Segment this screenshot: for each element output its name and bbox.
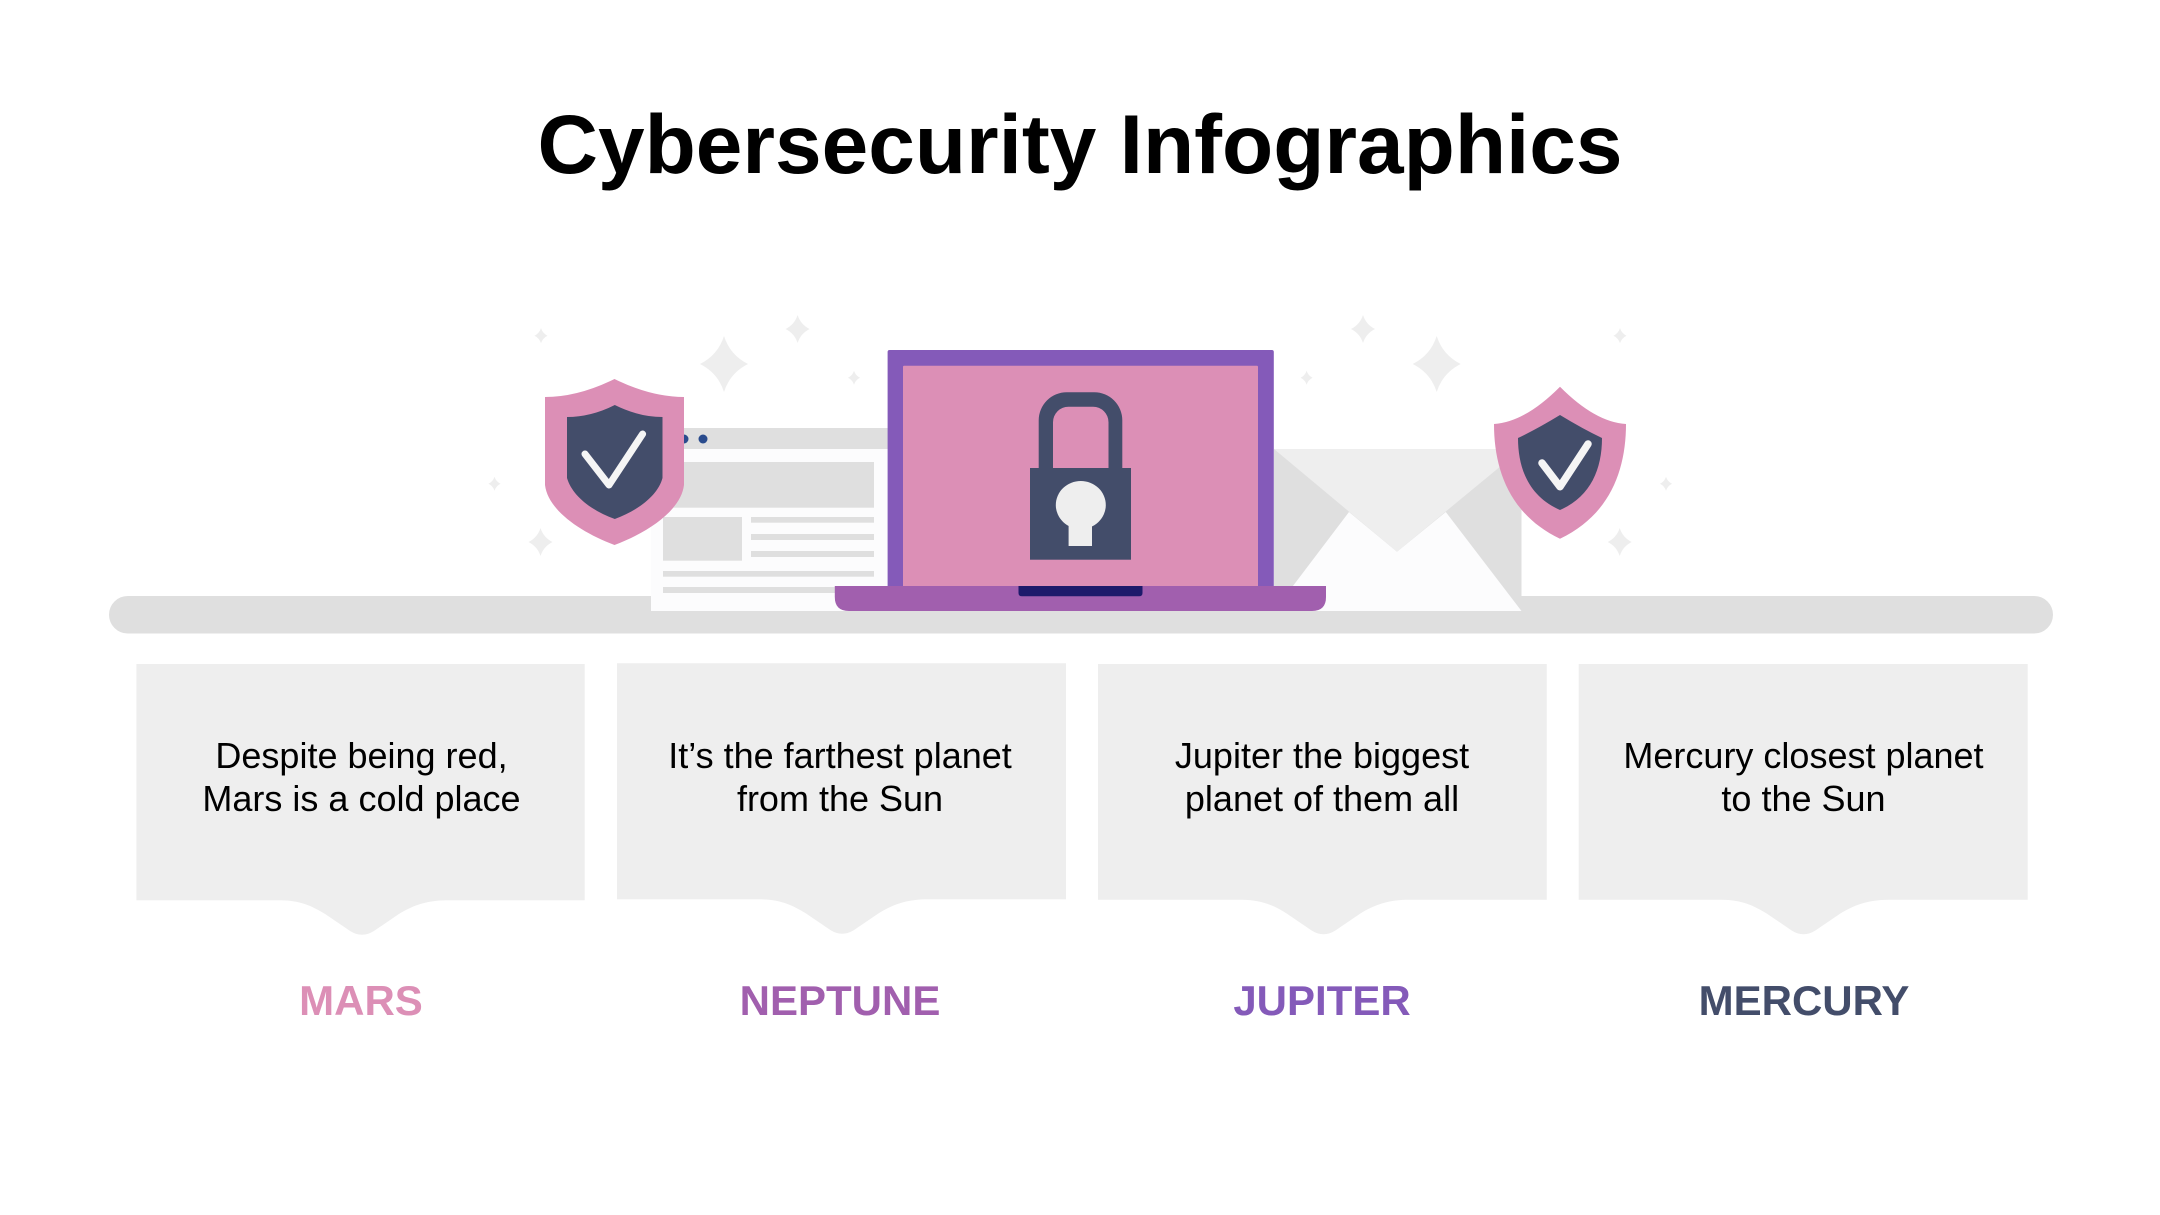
label: Jupiter: JUPITER bbox=[1233, 977, 1411, 1024]
laptop bbox=[835, 350, 1326, 611]
panel: Jupiter bbox=[1098, 664, 1547, 934]
icon: right shield bbox=[1494, 387, 1626, 539]
panel: Mars bbox=[136, 664, 585, 935]
label: Mercury: MERCURY bbox=[1699, 977, 1909, 1024]
icon: left shield bbox=[545, 379, 684, 545]
sparkles bbox=[488, 315, 1672, 556]
ground bar bbox=[109, 596, 2053, 634]
panel: Mercury: Mercury closest planet bbox=[1623, 735, 1984, 776]
panel: Neptune: It’s the farthest planet bbox=[668, 735, 1012, 776]
panel: Mercury bbox=[1579, 664, 2028, 934]
label: Neptune: NEPTUNE bbox=[740, 977, 940, 1024]
browser window bbox=[651, 428, 891, 611]
label: Mars: MARS bbox=[299, 977, 423, 1024]
panel: Neptune bbox=[617, 663, 1066, 934]
icon: padlock bbox=[1030, 392, 1131, 560]
panel: Jupiter: planet of them all bbox=[1185, 778, 1459, 819]
panel: Neptune: from the Sun bbox=[737, 778, 943, 819]
panel: Mercury: to the Sun bbox=[1721, 778, 1886, 819]
panel: Mars: Despite being red, bbox=[215, 735, 508, 776]
envelope bbox=[1274, 449, 1522, 611]
panel: Mars: Mars is a cold place bbox=[202, 778, 521, 819]
panel: Jupiter: Jupiter the biggest bbox=[1175, 735, 1469, 776]
title: Cybersecurity Infographics bbox=[537, 97, 1623, 191]
